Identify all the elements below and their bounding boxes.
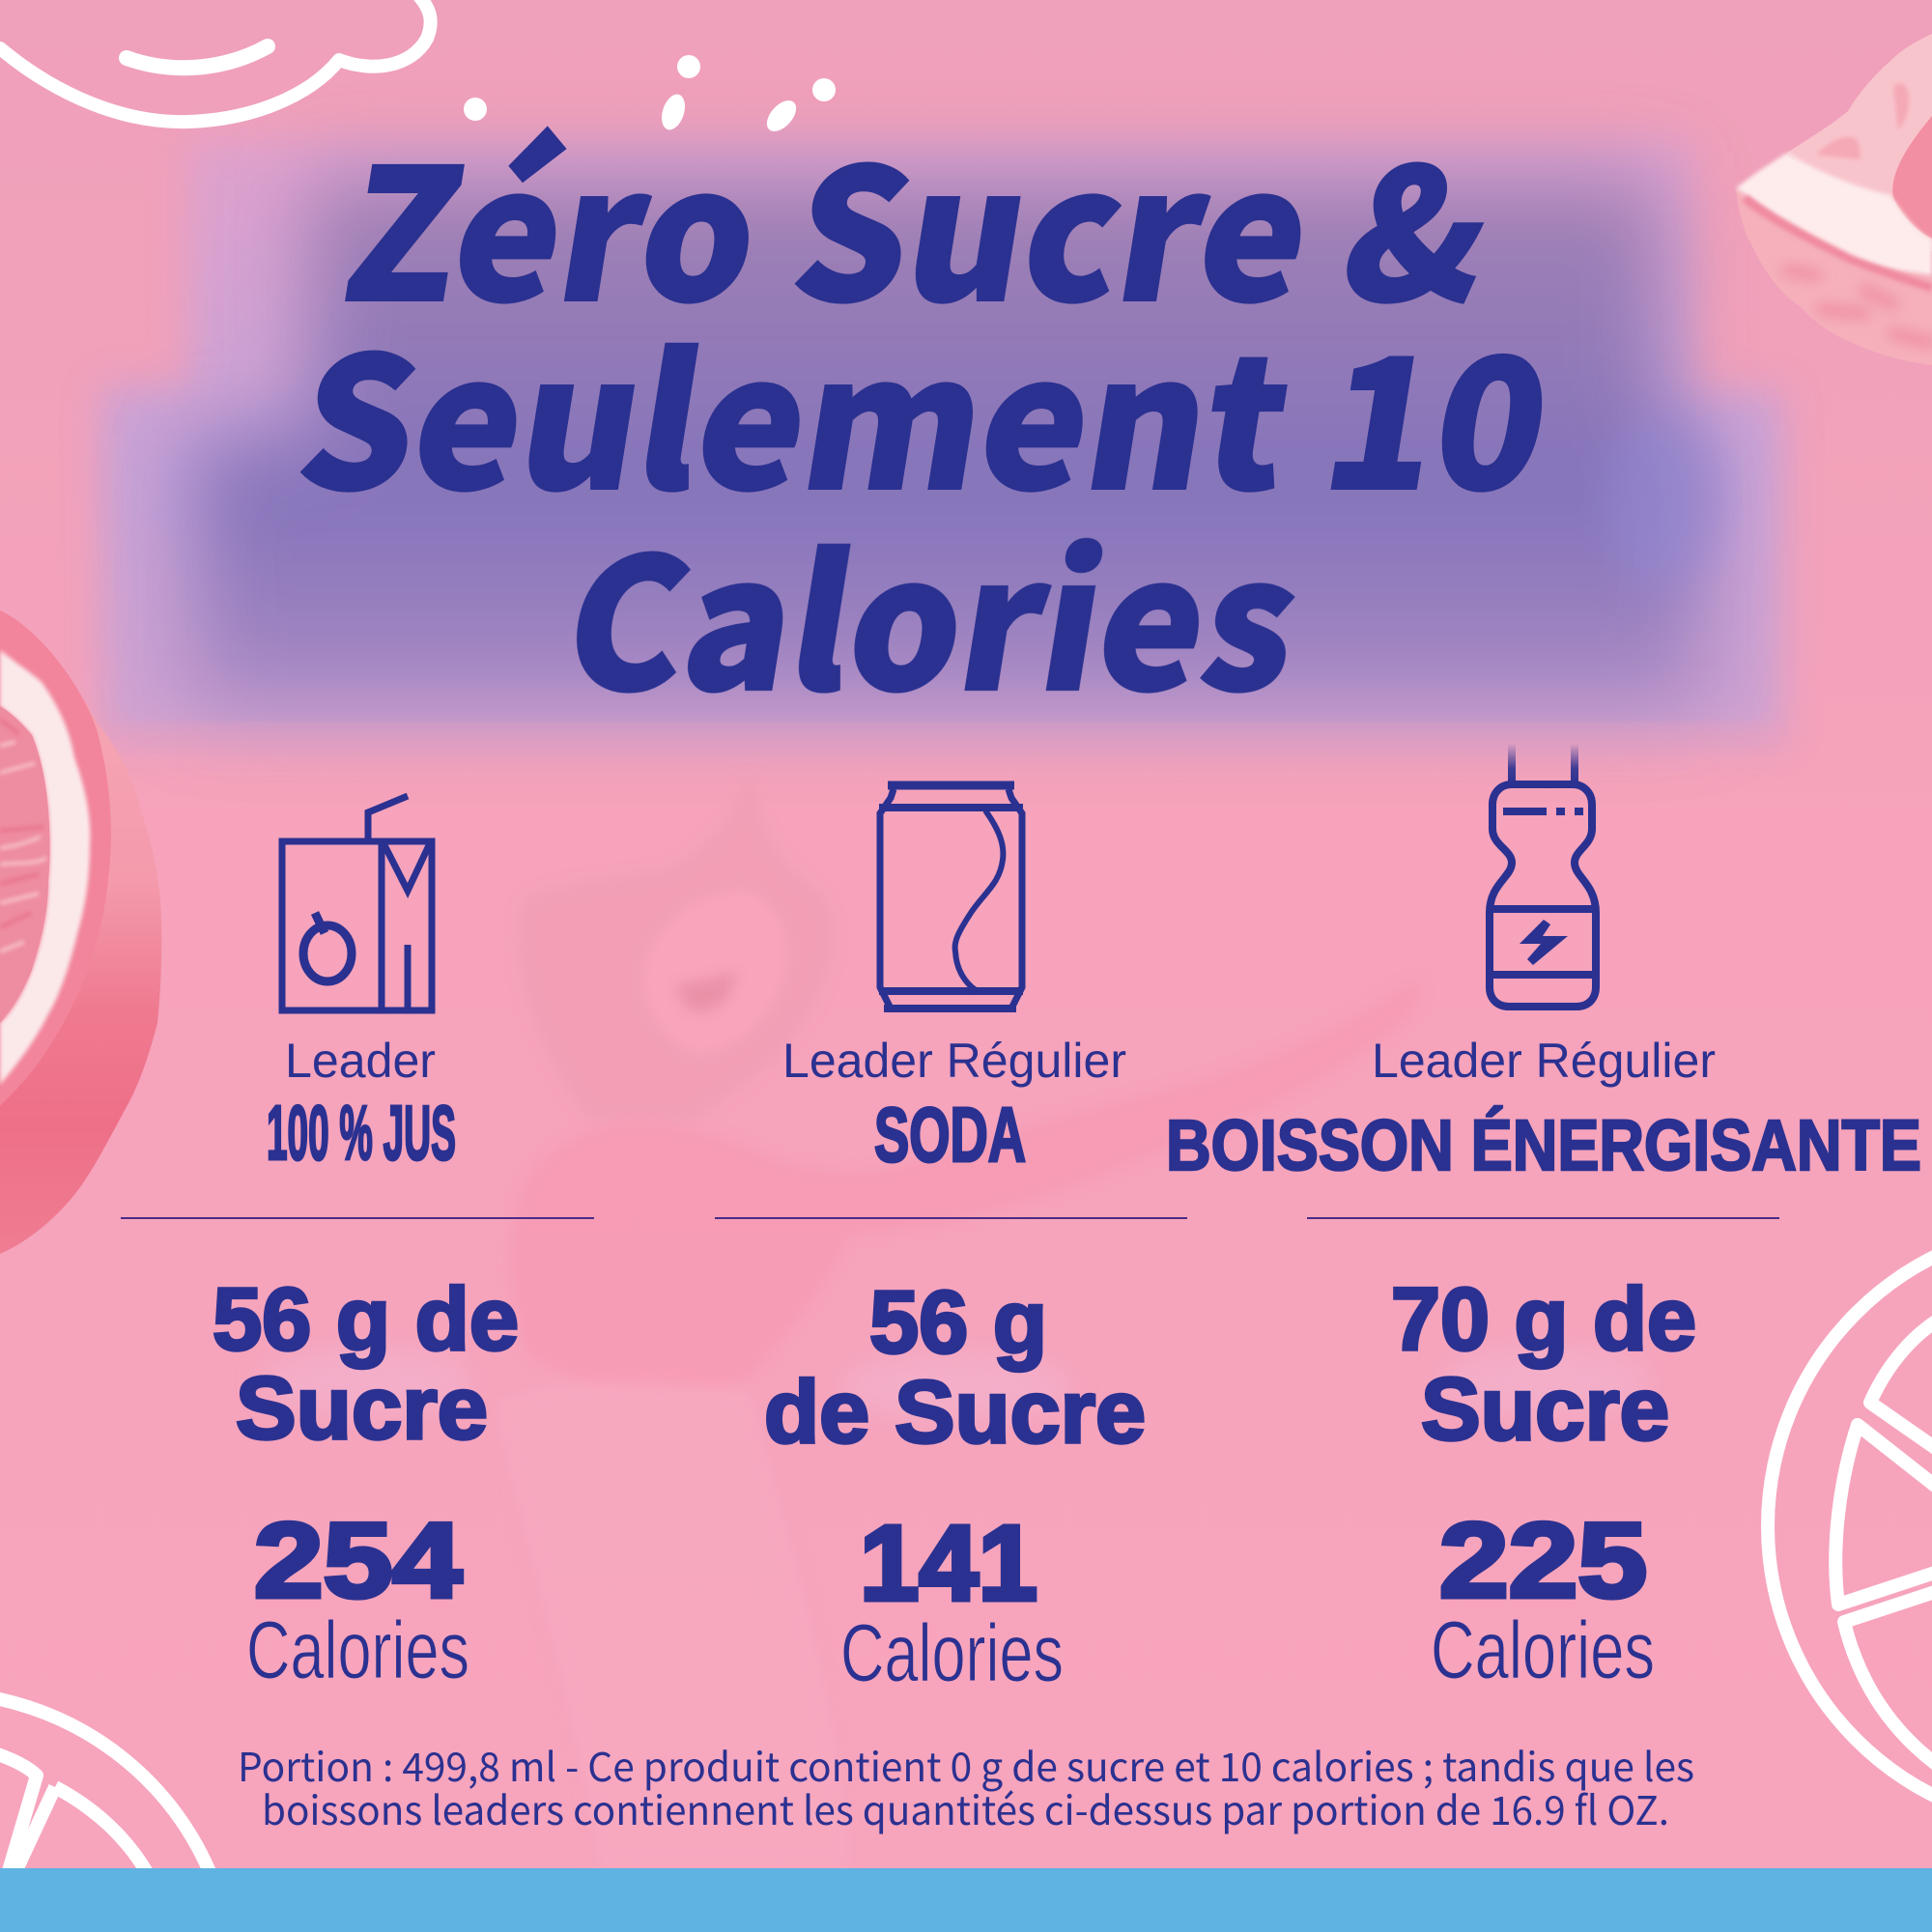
icon: soda can [879, 785, 1023, 1009]
white pith [0, 650, 90, 1085]
white citrus slice, bottom left [0, 1698, 211, 1874]
column 2 figures [764, 1273, 1146, 1623]
faint photo of woman [493, 773, 1421, 1868]
title blurred backdrop [101, 140, 1782, 749]
column 1 figures [213, 1270, 519, 1620]
footnote: boissons leaders contiennent les quantités ci-dessus par portion de 16.9 fl OZ. [262, 1778, 1669, 1836]
title: Seulement 10 [283, 279, 1569, 542]
inner rind crescent [0, 611, 111, 1106]
sugar amount: 56 g de Sucre: Sucre [236, 1359, 488, 1458]
label: Leader Régulier: Leader Régulier [1372, 1034, 1716, 1088]
sugar amount: 56 g de Sucre: 56 g de [213, 1270, 519, 1369]
sugar amount: 56 g de Sucre: 56 g [869, 1273, 1047, 1372]
dark line [1745, 198, 1932, 288]
label: Calories: Calories [1431, 1605, 1655, 1695]
icon: energy bottle [1490, 744, 1596, 1007]
sugar amount: 56 g de Sucre: de Sucre [764, 1363, 1146, 1462]
calories: 141: 141 [860, 1504, 1037, 1623]
footnote [238, 1735, 1694, 1836]
soft glows behind sugar numbers [261, 1347, 1652, 1421]
sugar amount: 70 g de Sucre: 70 g de [1391, 1270, 1696, 1369]
text: 100 % JUS [267, 1090, 456, 1176]
column 3 header: energy drink [1166, 744, 1921, 1185]
blue footer bar [0, 1868, 1932, 1932]
label: SODA: SODA [874, 1092, 1026, 1178]
label: Leader Régulier: Leader Régulier [782, 1034, 1126, 1088]
label: Leader: Leader [285, 1034, 436, 1088]
grapefruit wedge, top right [1736, 34, 1932, 365]
label: Calories: Calories [246, 1605, 469, 1695]
label: Calories: Calories [840, 1607, 1064, 1698]
white pith [1736, 153, 1932, 275]
dark segment [1892, 116, 1932, 239]
title: Zéro Sucre & [330, 91, 1508, 354]
outer skin [0, 611, 161, 1254]
sugar amount: 70 g de Sucre [1391, 1270, 1696, 1459]
sugar amount: 56 g de Sucre [213, 1270, 519, 1458]
sugar amount: 70 g de Sucre: Sucre [1421, 1360, 1669, 1459]
icon: juice box [282, 796, 432, 1010]
footnote: Portion : 499,8 ml - Ce produit contient 0 g de sucre et 10 calories ; tandis que les [238, 1735, 1694, 1793]
calories: 225: 225 [1439, 1501, 1647, 1620]
flesh [0, 706, 50, 1023]
sugar amount: 56 g de Sucre [764, 1273, 1146, 1462]
column 1 header: juice [267, 796, 456, 1176]
white line lemon, top left [0, 0, 431, 122]
title [283, 91, 1569, 743]
column 3 figures [1391, 1270, 1696, 1620]
white citrus slice, right [1768, 1225, 1932, 1828]
white juice drops [464, 55, 836, 136]
peel [1736, 188, 1932, 365]
title: Calories [551, 480, 1318, 743]
flesh streaks [0, 742, 46, 952]
pale flesh [1787, 34, 1932, 251]
calories: 254: 254 [254, 1501, 462, 1620]
grapefruit half, left edge [0, 611, 161, 1254]
column 2 header: soda [782, 785, 1126, 1178]
